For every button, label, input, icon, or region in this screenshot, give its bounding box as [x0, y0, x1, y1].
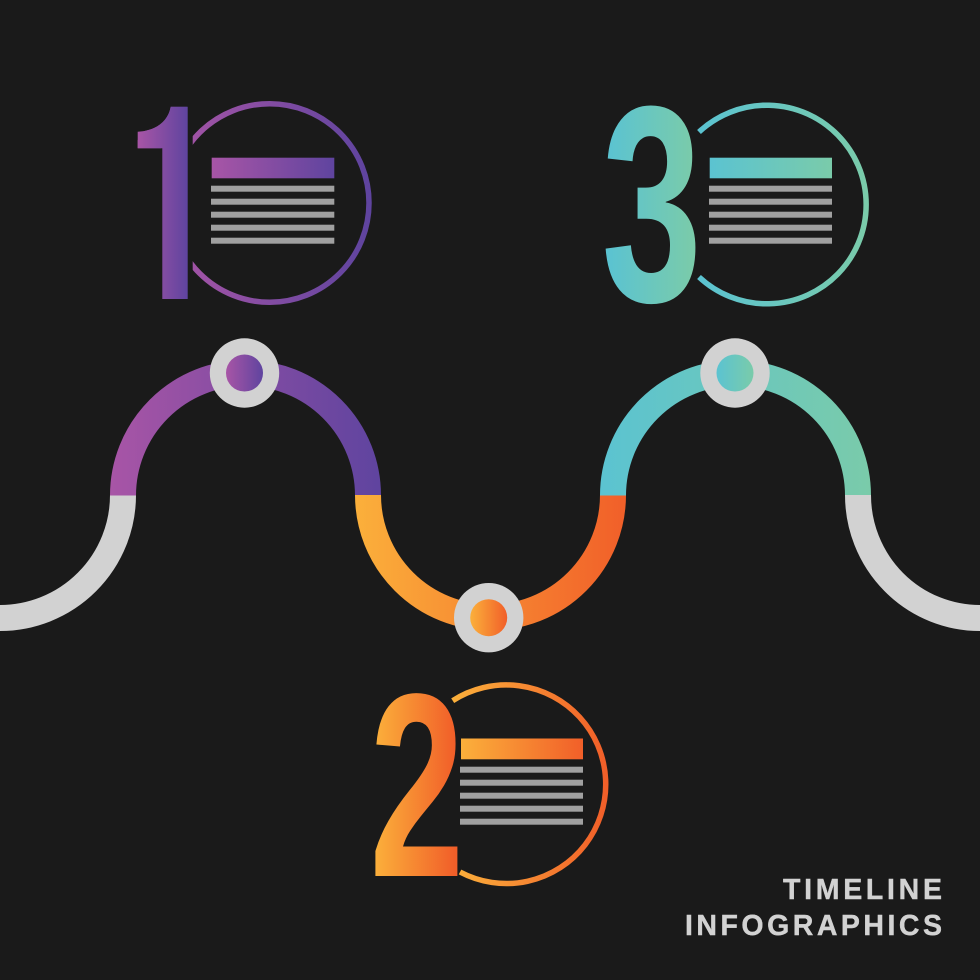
text placeholder 3	[709, 158, 832, 244]
node 1	[210, 338, 279, 408]
node 2	[454, 583, 523, 652]
circle outline 1	[170, 104, 369, 302]
timeline wave	[0, 373, 980, 618]
title	[685, 874, 942, 942]
title line 1: TIMELINE	[783, 874, 942, 906]
step 2 block	[370, 639, 606, 932]
step 1 block	[138, 101, 372, 305]
step 3 block	[602, 48, 866, 360]
number 3: 3	[602, 48, 702, 360]
wave segment: right gray	[858, 495, 980, 618]
text placeholder 2	[460, 738, 583, 825]
circle outline 2	[453, 685, 606, 884]
number 1: 1	[122, 35, 219, 413]
node 3	[700, 338, 770, 408]
text placeholder 1	[211, 158, 334, 244]
title line 2: INFOGRAPHICS	[685, 910, 942, 942]
wave segment: step 1 purple	[123, 373, 368, 496]
wave segment: step 3 teal	[613, 373, 858, 496]
wave segment: step 2 orange	[368, 495, 613, 617]
number 2: 2	[370, 639, 464, 932]
circle outline 3	[699, 105, 866, 304]
wave segment: left gray	[0, 495, 123, 618]
